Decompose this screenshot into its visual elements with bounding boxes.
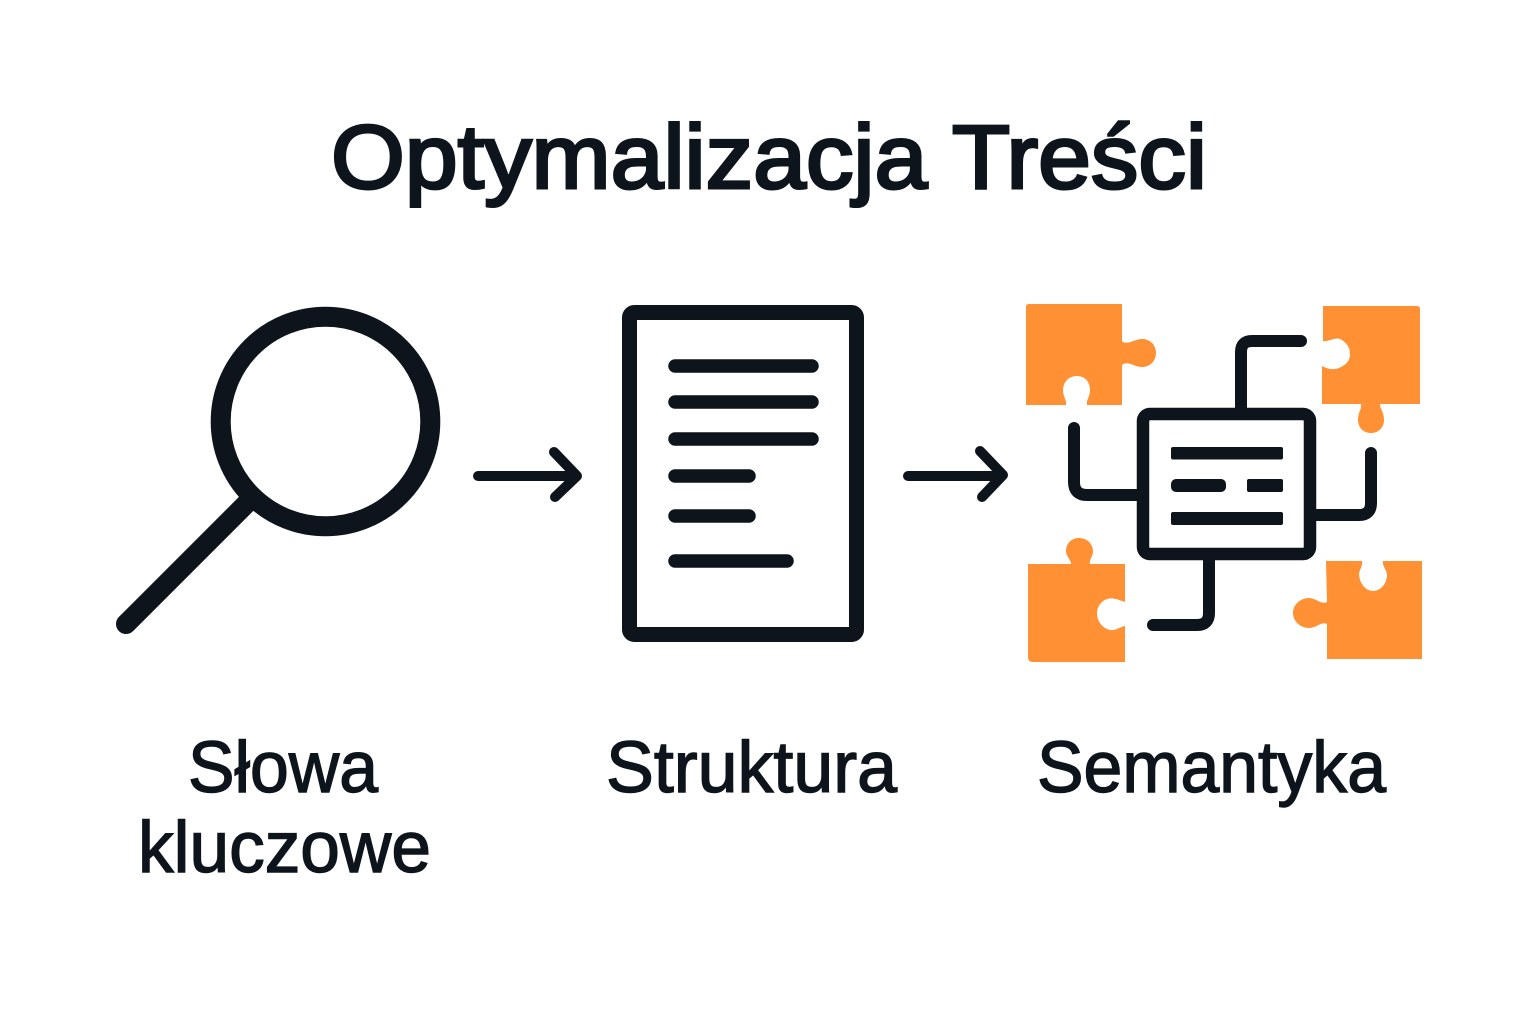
arrow: structure to semantics [908,451,1003,497]
central content card [1143,414,1310,554]
puzzle piece: bottom left [1028,538,1125,662]
icon: document [630,312,856,634]
label: semantics: Semantyka [1037,728,1387,808]
title: Optymalizacja Treści [331,108,1207,208]
puzzle piece: bottom right [1293,561,1422,659]
icon: semantic puzzle network [1026,304,1422,662]
label: keywords: kluczowe [138,808,431,888]
label: keywords: Słowa [188,728,379,808]
icon: magnifying glass [126,317,430,624]
puzzle piece: top left [1026,304,1156,405]
connectors [1074,341,1371,625]
puzzle piece: top right [1322,306,1420,433]
label: structure: Struktura [606,728,898,808]
label: keywords [138,728,431,888]
arrow: keywords to structure [478,452,577,497]
